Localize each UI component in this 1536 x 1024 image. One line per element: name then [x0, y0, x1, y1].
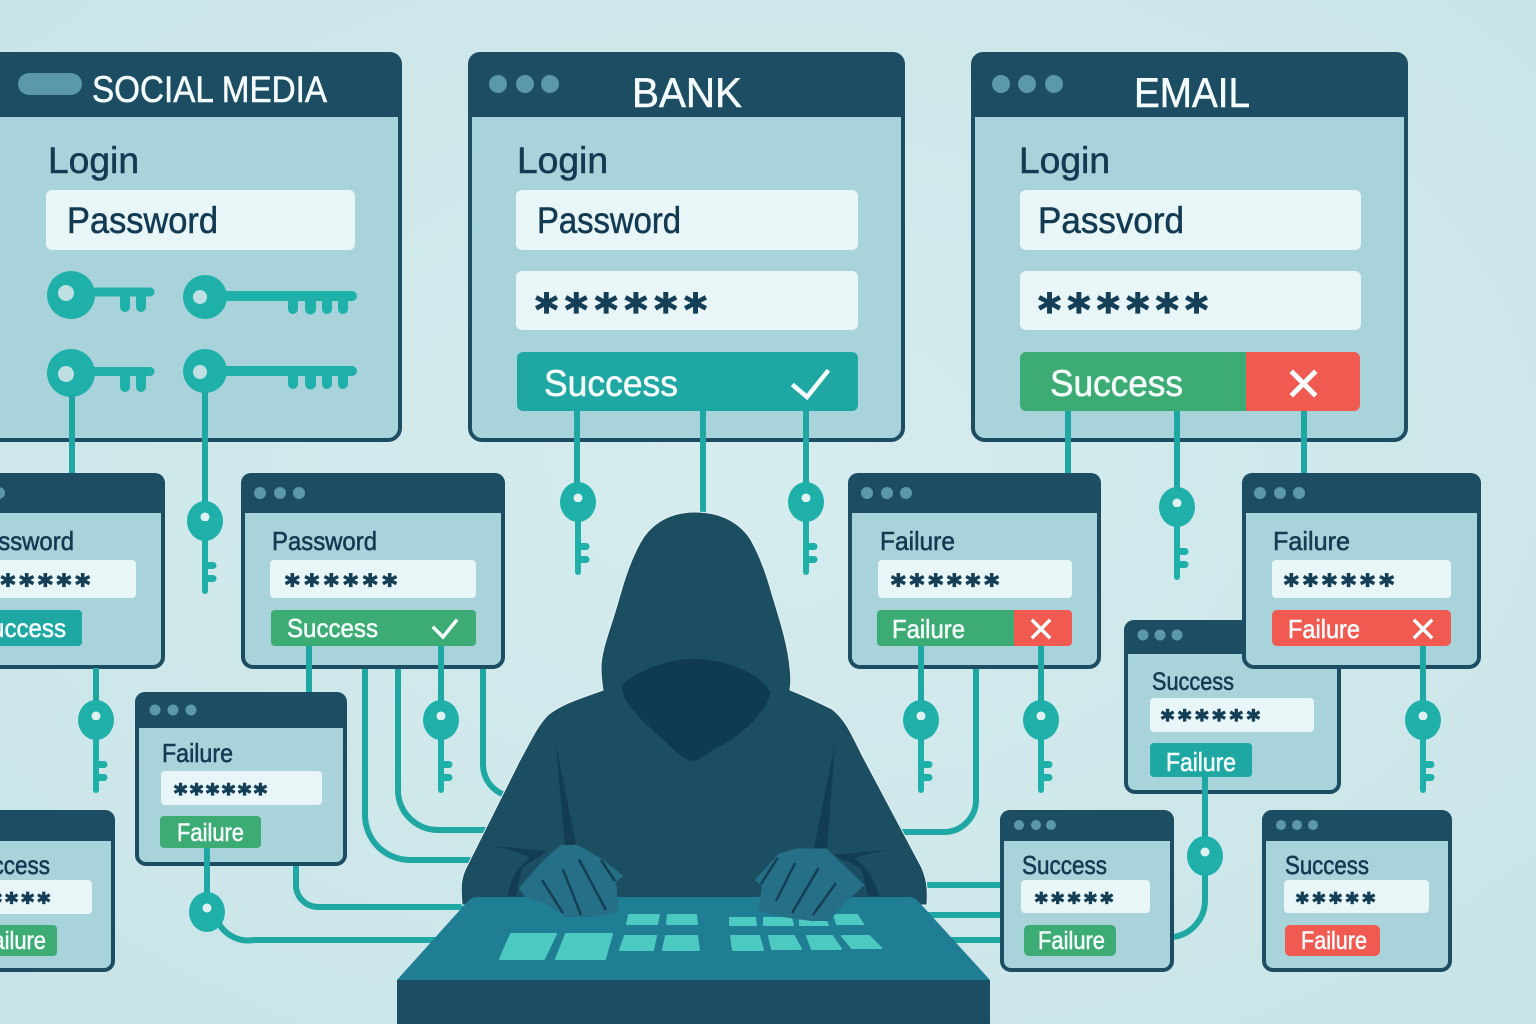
panel: cropped bottom-left window — [0, 810, 115, 970]
panel: cropped success window — [0, 473, 165, 667]
icon: hanging key, far right — [1405, 700, 1441, 793]
right hand — [756, 850, 863, 920]
panel: bank login window — [468, 52, 905, 440]
panel: success window lower right: Failure — [1301, 927, 1367, 955]
panel: success window lower right: Success — [1285, 850, 1369, 880]
panel: password success window: Password — [272, 526, 377, 556]
keyboard desk — [397, 897, 990, 1024]
panel: bank login window: ****** — [535, 285, 707, 336]
hood and body silhouette — [461, 512, 927, 905]
panel: success window lower right — [1262, 810, 1452, 970]
heading: social media: SOCIAL MEDIA — [92, 69, 327, 110]
masked password field — [516, 271, 858, 330]
connection wires in front of windows — [72, 392, 1423, 900]
panel: failure window right — [1242, 473, 1481, 667]
icon: key 2 — [183, 275, 357, 319]
password field — [516, 190, 858, 250]
icon: x mark — [1033, 621, 1049, 637]
left hand — [520, 846, 622, 916]
panel: success window lower middle: Failure — [1038, 927, 1105, 955]
icon: hanging key, failure right — [1023, 700, 1059, 793]
panel: success window behind: ****** — [1161, 705, 1260, 734]
panel: email login window — [971, 52, 1408, 440]
panel: failure window centre right: ****** — [891, 568, 999, 601]
icon: x mark — [1293, 373, 1314, 394]
panel: bank login window: Success — [544, 363, 678, 404]
icon: check — [794, 372, 827, 397]
icon: hanging key, window B — [423, 700, 459, 793]
panel: failure window centre right: Failure — [880, 526, 955, 556]
icon: hanging key, email — [1159, 487, 1195, 580]
connection wires behind windows and figure — [218, 668, 1205, 940]
panel: success window behind: Success — [1152, 668, 1234, 696]
panel: social media login window — [0, 52, 402, 440]
panel: failure window centre right: Failure — [892, 614, 965, 644]
icon: hanging key, bank left — [560, 482, 596, 575]
success badge — [517, 352, 858, 411]
panel: failure window left: Failure — [177, 819, 244, 847]
panel: success window behind — [1124, 620, 1342, 792]
sleeve fold left — [556, 744, 576, 848]
icon: x mark — [1415, 621, 1431, 637]
header pill — [18, 73, 82, 95]
icon: hanging key, social — [187, 501, 223, 594]
panel: email login window: ****** — [1038, 285, 1208, 336]
login label: Login — [1019, 140, 1110, 181]
password label: Password — [67, 200, 218, 241]
icon: hanging key, window A — [78, 700, 114, 793]
keys — [500, 915, 881, 959]
desk top — [397, 897, 990, 980]
success and failure badge — [1020, 352, 1246, 411]
panel: success window lower right: ***** — [1296, 888, 1375, 916]
icon: key node, lower right wire — [1187, 836, 1223, 876]
panel: bank login window: Password — [537, 200, 681, 241]
panel: password success window — [241, 473, 505, 667]
panel: failure window right: Failure — [1273, 526, 1350, 556]
login label: Login — [48, 140, 139, 181]
panel: password success window: ****** — [285, 568, 397, 601]
shadowed face — [622, 659, 770, 761]
panel: failure window right: Failure — [1288, 614, 1360, 644]
desk front — [397, 980, 990, 1024]
icon: key 4 — [183, 349, 357, 393]
panel: email login window: Passvord — [1038, 200, 1184, 241]
panel: failure window left: Failure — [162, 738, 233, 768]
heading: bank: BANK — [632, 69, 742, 116]
panel: success window behind: Failure — [1166, 747, 1236, 777]
panel: email login window: Success — [1050, 363, 1183, 404]
heading: email: EMAIL — [1134, 69, 1250, 116]
panel: failure window left — [135, 692, 347, 864]
sleeve fold right — [813, 744, 835, 852]
panel: password success window: Success — [287, 613, 378, 643]
panel: success window lower middle: ***** — [1035, 888, 1113, 916]
panel: success window lower middle — [1000, 810, 1174, 970]
icon: check — [434, 621, 456, 637]
panel: failure window centre right — [848, 473, 1101, 667]
cuff shadow left — [495, 846, 547, 896]
cuff shadow right — [833, 850, 890, 896]
panel: failure window left: ****** — [174, 779, 267, 808]
icon: key 3 — [47, 349, 154, 397]
icon: key node, lower left wire — [189, 892, 225, 932]
hooded hacker figure — [461, 512, 927, 905]
icon: hanging key, bank right — [788, 482, 824, 575]
password field — [1020, 190, 1361, 250]
panel: failure window right: ****** — [1284, 568, 1394, 601]
panel: success window lower middle: Success — [1022, 850, 1107, 880]
masked password field — [1020, 271, 1361, 330]
login label: Login — [517, 140, 608, 181]
password field — [46, 190, 355, 250]
icon: key 1 — [47, 271, 154, 319]
icon: hanging key, failure left — [903, 700, 939, 793]
